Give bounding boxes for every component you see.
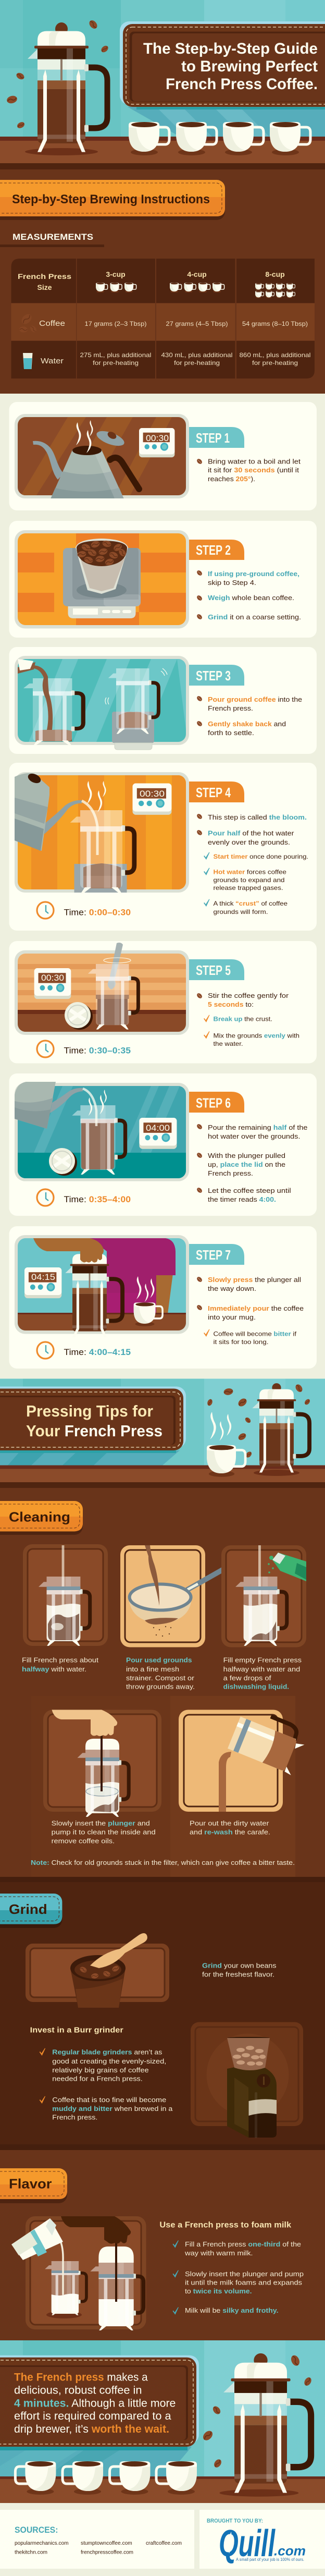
table coffee row: 27 grams (4–5 Tbsp) — [166, 320, 228, 327]
icon: grinder — [227, 2037, 277, 2138]
icon: kettle pouring — [15, 772, 106, 855]
grind text — [202, 1961, 277, 1978]
table header row: 8-cup — [265, 270, 285, 278]
panel: grind beans — [26, 1933, 169, 2008]
step 7 text: into your mug. — [208, 1313, 256, 1321]
panel: step 6 — [9, 1073, 317, 1216]
step 7 text — [196, 1276, 304, 1346]
icon: pitcher and pour stream — [18, 659, 53, 730]
step 1 tab: STEP 1 — [196, 430, 230, 446]
heading: flavor — [0, 2168, 67, 2203]
icon: small cups — [96, 283, 295, 298]
icon: four cups — [129, 122, 310, 155]
step 2 text: skip to Step 4. — [208, 579, 256, 587]
cleaning captions top row: halfway with water and — [223, 1665, 300, 1673]
tips heading text: Pressing Tips for — [26, 1402, 153, 1420]
title text: to Brewing Perfect — [181, 58, 318, 75]
note: Note: Check for old grounds stuck in the filter, which can give coffee a bitter taste. — [31, 1859, 295, 1866]
logo: Quill.com: .com — [274, 2543, 306, 2559]
panel: step 7 — [9, 1226, 317, 1369]
illustration: stirring — [15, 943, 189, 1035]
table header row — [11, 259, 315, 303]
conclusion text: effort is required compared to a — [14, 2410, 171, 2422]
conclusion wall — [0, 2340, 325, 2476]
illustration: scale with beans — [15, 530, 189, 629]
step 2 tab: STEP 2 — [196, 542, 231, 558]
cleaning captions bottom row: and re-wash the carafe. — [190, 1828, 270, 1836]
panel: strainer — [120, 1545, 227, 1647]
icon: coffee beans — [19, 312, 38, 334]
icon: strainer — [129, 1545, 227, 1637]
flavor text: to twice its volume. — [185, 2287, 252, 2295]
heading: cleaning — [0, 1501, 83, 1535]
table header row: 4-cup — [187, 270, 207, 278]
counter — [0, 2476, 325, 2503]
step 6 text: hot water over the grounds. — [208, 1132, 300, 1140]
panel: step 2 — [9, 521, 317, 638]
heading: step-by-step brewing instructions — [0, 180, 225, 220]
counter — [0, 1465, 325, 1488]
step 7 time — [37, 1342, 131, 1359]
cleaning captions bottom row — [52, 1820, 270, 1845]
flavor text — [159, 2221, 304, 2315]
icon: arm and hand — [33, 1238, 104, 1263]
section: cleaning background — [0, 1488, 325, 1877]
step 4 text: grounds to expand and — [214, 876, 284, 884]
icon: press with plunger — [77, 1735, 129, 1817]
icon: pour stream — [219, 1752, 231, 1812]
flavor text: Fill a French press one-third of the — [185, 2240, 301, 2248]
banner shadow — [128, 107, 325, 137]
table water row: 275 mL, plus additional — [80, 351, 151, 359]
panel: sources: SOURCES: — [15, 2525, 58, 2535]
cleaning captions top row: Fill French press about — [22, 1656, 98, 1664]
title text — [143, 40, 318, 93]
step 6 text: With the plunger pulled — [208, 1152, 285, 1159]
panel: step 4 — [9, 763, 317, 931]
step 3 tab — [189, 665, 244, 686]
cleaning captions top row: a few drops of — [223, 1674, 271, 1682]
logo: Quill.com: A small part of your job is 100% of ours. — [236, 2557, 304, 2562]
section: pressing tips header — [0, 1378, 325, 1488]
step 7 text: Immediately pour the coffee — [208, 1304, 304, 1312]
icon: water glass — [23, 353, 32, 369]
illustration: stirring: 00:30 — [41, 973, 64, 983]
cleaning captions bottom row: Pour out the dirty water — [190, 1820, 269, 1827]
step 2 text: Grind it on a coarse setting. — [208, 613, 301, 621]
title text: The Step-by-Step Guide — [143, 40, 318, 57]
icon: soap bottle — [268, 1553, 306, 1581]
tips banner — [0, 1387, 186, 1450]
conclusion text: The French press makes a — [14, 2372, 148, 2384]
illustration: bloom pour — [15, 772, 189, 894]
step 6 text: the timer reads 4:00. — [208, 1195, 276, 1203]
step 5 text: Mix the grounds evenly with — [214, 1032, 299, 1040]
illustration: bloom pour: 00:30 — [140, 789, 165, 799]
table header row: French Press — [18, 272, 71, 280]
table water row: for pre-heating — [174, 359, 220, 367]
source links: stumptowncoffee.com — [81, 2540, 132, 2546]
step 6 text: French press. — [208, 1169, 253, 1177]
icon: press with grounds — [70, 810, 134, 894]
step 1 text — [196, 458, 301, 483]
icon: person — [89, 1238, 176, 1314]
illustration: second pour: 04:00 — [146, 1123, 170, 1133]
step 4 text — [196, 813, 308, 915]
table coffee row: 17 grams (2–3 Tbsp) — [84, 320, 147, 327]
step 5 text: Break up the crust. — [214, 1016, 272, 1023]
step 4 text: evenly over the grounds. — [208, 838, 290, 846]
illustration: pouring grounds and shaking press — [15, 656, 189, 750]
panel: brand — [199, 2510, 325, 2569]
tips heading text — [26, 1402, 162, 1440]
icon: kettle pouring — [15, 1082, 107, 1129]
step 3 tab: STEP 3 — [196, 668, 231, 683]
step 3 text: forth to settle. — [208, 729, 254, 737]
conclusion banner — [0, 2355, 199, 2447]
cleaning captions top row: throw grounds away. — [126, 1683, 195, 1690]
title text: French Press Coffee. — [166, 76, 318, 93]
icon: hand — [52, 1710, 117, 1736]
conclusion text — [14, 2372, 176, 2435]
grind text: for the freshest flavor. — [202, 1970, 274, 1978]
step 5 text: 5 seconds to: — [208, 1000, 254, 1008]
flavor text: Milk will be silky and frothy. — [185, 2306, 278, 2314]
icon: press with spoon — [88, 943, 138, 1030]
burr grinder text: Invest in a Burr grinder — [30, 2026, 123, 2035]
step 4 tab: STEP 4 — [196, 785, 231, 800]
cleaning captions top row: dishwashing liquid. — [223, 1683, 289, 1690]
cleaning captions bottom row: Slowly insert the plunger and — [52, 1820, 150, 1827]
step 3 text — [196, 695, 302, 737]
icon: press filling — [72, 1105, 126, 1175]
section: flavor background — [0, 2144, 325, 2340]
panel: plunger — [43, 1710, 161, 1817]
step 7 text: it sits for too long. — [214, 1338, 269, 1346]
icon: press being plunged — [65, 1248, 122, 1337]
heading: measurements: MEASUREMENTS — [12, 232, 93, 242]
table coffee row: Coffee — [39, 320, 65, 328]
conclusion text: 4 minutes. Although a little more — [14, 2398, 176, 2410]
icon: press filling with grounds — [23, 678, 83, 746]
conclusion text: delicious, robust coffee in — [14, 2385, 142, 2397]
cleaning captions top row: Pour used grounds — [126, 1656, 192, 1664]
illustration: plunging: 04:15 — [31, 1272, 55, 1282]
step 4 text: Start timer once done pouring. — [214, 853, 308, 860]
step 4 text: This step is called the bloom. — [208, 813, 307, 821]
icon: scattered beans — [6, 19, 109, 129]
panel: fill with water — [23, 1544, 108, 1646]
heading: cleaning: Cleaning — [9, 1509, 70, 1524]
tips wall — [0, 1378, 325, 1465]
icon: mug with steam — [134, 1276, 162, 1326]
step 7 tab: STEP 7 — [196, 1247, 231, 1263]
step 5 text — [196, 992, 299, 1047]
icon: press with suds — [235, 1577, 287, 1646]
source links: frenchpresscoffee.com — [81, 2549, 133, 2556]
step 3 text: French press. — [208, 704, 253, 712]
step 3 text: Pour ground coffee into the — [208, 695, 302, 703]
instructions section background — [0, 169, 325, 394]
illustration: plunging — [15, 1235, 189, 1337]
step 6 tab — [189, 1092, 244, 1113]
step 5 tab: STEP 5 — [196, 962, 231, 978]
cleaning captions bottom row: pump it to clean the inside and — [52, 1828, 156, 1836]
step 1 tab — [189, 427, 244, 448]
table water row — [11, 341, 315, 379]
source links: thekitchn.com — [15, 2549, 47, 2556]
step 4 text: Pour half of the hot water — [208, 829, 294, 837]
table water row: Water — [41, 357, 64, 365]
icon: beans — [207, 1383, 311, 1459]
cleaning captions top row: strainer. Compost or — [126, 1674, 195, 1682]
step 4 text: grounds will form. — [214, 908, 268, 915]
flavor text: Slowly insert the plunger and pump — [185, 2270, 304, 2278]
step 6 tab: STEP 6 — [196, 1095, 231, 1110]
step 5 time — [37, 1041, 131, 1057]
table header row: 3-cup — [106, 270, 126, 278]
step 7 tab — [189, 1244, 244, 1265]
icon: milk carton pouring — [11, 2218, 63, 2294]
step 6 text: up, place the lid on the — [208, 1161, 285, 1168]
table water row: 430 mL, plus additional — [161, 351, 232, 359]
icon: beans — [201, 2354, 312, 2469]
table coffee row — [11, 303, 315, 340]
panel: dish soap — [221, 1545, 306, 1647]
step 2 tab — [189, 540, 244, 560]
icon: tilted press — [227, 1706, 309, 1776]
flavor text: Use a French press to foam milk — [159, 2221, 292, 2229]
heading: flavor: Flavor — [9, 2176, 52, 2192]
step 7 text: Coffee will become bitter if — [214, 1330, 297, 1338]
flavor text: it until the milk foams and expands — [185, 2278, 303, 2287]
title banner — [120, 21, 325, 107]
panel: step 1 — [9, 402, 317, 510]
heading: grind: Grind — [9, 1901, 47, 1917]
counter — [0, 137, 325, 169]
step 3 text: Gently shake back and — [208, 720, 286, 728]
icon: mug with steam — [207, 1412, 245, 1477]
cleaning captions top row: halfway with water. — [22, 1665, 86, 1673]
step 4 text: release trapped gases. — [214, 884, 283, 892]
step 6 text: Pour the remaining half of the — [208, 1124, 307, 1131]
icon: left press with milk — [45, 2260, 86, 2318]
step 2 text — [196, 569, 301, 621]
step 2 text: Weigh whole bean coffee. — [208, 594, 294, 602]
step 4 text: A thick “crust” of coffee — [214, 900, 288, 907]
step 5 text: the water. — [214, 1040, 243, 1047]
cleaning captions top row: into a fine mesh — [126, 1665, 179, 1673]
step 4 tab — [189, 782, 244, 802]
icon: french press — [25, 22, 107, 155]
burr grinder text: needed for a French press. — [52, 2074, 143, 2082]
cleaning captions top row — [22, 1656, 302, 1690]
icon: right press with foam — [90, 2242, 144, 2330]
heading: step-by-step brewing instructions: Step-by-Step Brewing Instructions — [12, 192, 210, 206]
grind text: Grind your own beans — [202, 1961, 277, 1969]
hero section — [0, 0, 325, 169]
logo: Quill.com: Quill — [219, 2523, 276, 2565]
panel: foam milk — [11, 2216, 146, 2330]
section: conclusion — [0, 2340, 325, 2503]
burr grinder text: good at creating the evenly-sized, — [52, 2057, 166, 2065]
flavor text: way with warm milk. — [184, 2249, 253, 2257]
table water row: for pre-heating — [252, 359, 298, 367]
step 7 time: Time: 4:00–4:15 — [64, 1347, 131, 1357]
burr grinder text: French press. — [52, 2114, 97, 2121]
icon: four cups — [15, 2461, 197, 2495]
panel: step 5 — [9, 941, 317, 1064]
heading: grind — [0, 1894, 62, 1928]
icon: press on scale — [105, 668, 167, 750]
panel: sources — [0, 2510, 194, 2569]
tips heading text: Your French Press — [26, 1422, 162, 1440]
burr grinder text — [30, 2026, 173, 2121]
icon: press with water — [39, 1577, 90, 1646]
step 2 text: If using pre-ground coffee, — [208, 570, 299, 578]
icon: french press — [219, 2353, 311, 2497]
panel: step 3 — [9, 647, 317, 754]
step 1 text: it sit for 30 seconds (until it — [208, 466, 299, 474]
illustration: second pour — [15, 1082, 189, 1181]
step 1 text: reaches 205°). — [208, 475, 255, 483]
section: grind background — [0, 1877, 325, 2144]
table water row: for pre-heating — [93, 359, 139, 367]
step 6 time: Time: 0:35–4:00 — [64, 1194, 131, 1204]
conclusion text: drip brewer, it’s worth the wait. — [14, 2423, 169, 2435]
panel: pour out — [179, 1706, 309, 1812]
step 6 time — [37, 1189, 131, 1206]
burr grinder text: muddy and bitter when brewed in a — [52, 2105, 173, 2113]
step 4 time — [37, 902, 131, 919]
measurements table — [11, 259, 315, 379]
step 6 text — [196, 1123, 307, 1203]
illustration: kettle and timer: 00:30 — [146, 433, 169, 443]
step 4 time: Time: 0:00–0:30 — [64, 907, 131, 918]
source links: craftcoffee.com — [146, 2540, 182, 2546]
cleaning captions top row: Fill empty French press — [223, 1656, 302, 1664]
icon: scale — [74, 864, 127, 893]
panel: burr grinder — [191, 2022, 303, 2138]
table header row: Size — [37, 283, 52, 291]
step 5 text: Stir the coffee gently for — [208, 992, 289, 999]
cleaning captions bottom row: remove coffee oils. — [52, 1837, 115, 1845]
icon: hand — [61, 2216, 131, 2244]
step 7 text: Slowly press the plunger all — [208, 1276, 301, 1284]
burr grinder text: relatively big grains of coffee — [52, 2066, 149, 2074]
icon: french press — [252, 1383, 309, 1476]
source links: popularmechanics.com — [15, 2540, 69, 2546]
icon: cup of beans with scoop — [70, 1933, 147, 2008]
table coffee row: 54 grams (8–10 Tbsp) — [242, 320, 308, 327]
panel: brand: BROUGHT TO YOU BY: — [207, 2518, 263, 2524]
step 7 text: the way down. — [208, 1285, 256, 1292]
burr grinder text: Regular blade grinders aren’t as — [52, 2048, 162, 2056]
step 4 text: Hot water forces coffee — [214, 869, 286, 876]
step 5 tab — [189, 959, 244, 980]
heading: measurements — [0, 232, 104, 247]
source links — [15, 2540, 182, 2556]
banner shadow — [0, 1450, 180, 1465]
step 6 text: Let the coffee steep until — [208, 1187, 291, 1194]
banner shadow — [0, 2447, 192, 2476]
illustration: kettle and timer — [15, 414, 189, 498]
step 5 time: Time: 0:30–0:35 — [64, 1046, 131, 1055]
table water row: 860 mL, plus additional — [240, 351, 310, 359]
hero wall — [0, 0, 325, 137]
burr grinder text: Coffee that is too fine will become — [52, 2096, 166, 2104]
step 1 text: Bring water to a boil and let — [208, 458, 301, 466]
